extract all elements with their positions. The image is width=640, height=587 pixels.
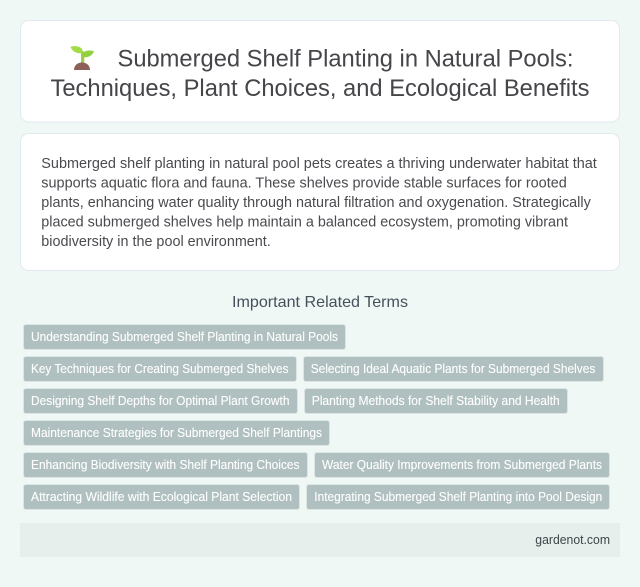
footer bbox=[20, 523, 620, 557]
tag 9: Attracting Wildlife with Ecological Plant Selection bbox=[31, 490, 292, 504]
tag 3 bbox=[304, 356, 604, 382]
tag 8 bbox=[314, 452, 610, 478]
tag 5: Planting Methods for Shelf Stability and Health bbox=[312, 394, 560, 408]
tag 6 bbox=[24, 420, 330, 446]
paragraph line 3: plants, enhancing water quality through natural filtration and oxygenation. Strategically bbox=[41, 195, 591, 211]
tag 8: Water Quality Improvements from Submerged Plants bbox=[322, 458, 602, 472]
paragraph line 2: supports aquatic flora and fauna. These shelves provide stable surfaces for rooted bbox=[41, 176, 567, 192]
tag 2 bbox=[24, 356, 296, 382]
icon: seedling bbox=[70, 46, 94, 70]
tag 4 bbox=[24, 388, 298, 414]
panel: title card bbox=[20, 20, 620, 122]
panel: summary paragraph bbox=[20, 134, 620, 270]
tag 4: Designing Shelf Depths for Optimal Plant Growth bbox=[31, 394, 290, 408]
paragraph line 4: placed submerged shelves help maintain a balanced ecosystem, promoting vibrant bbox=[41, 215, 568, 231]
tag 10 bbox=[306, 484, 610, 510]
tag 9 bbox=[24, 484, 300, 510]
title line 1: Submerged Shelf Planting in Natural Pools: bbox=[118, 46, 574, 72]
tag 3: Selecting Ideal Aquatic Plants for Submerged Shelves bbox=[311, 362, 595, 376]
title line 2: Techniques, Plant Choices, and Ecological Benefits bbox=[50, 75, 590, 102]
tag list bbox=[24, 324, 610, 510]
paragraph line 1: Submerged shelf planting in natural pool pets creates a thriving underwater habitat that bbox=[41, 156, 597, 172]
heading: related terms: Important Related Terms bbox=[232, 294, 408, 311]
tag 1: Understanding Submerged Shelf Planting in Natural Pools bbox=[31, 330, 338, 344]
tag 5 bbox=[304, 388, 568, 414]
footer source text: gardenot.com bbox=[535, 533, 610, 547]
tag 2: Key Techniques for Creating Submerged Shelves bbox=[31, 362, 288, 376]
paragraph line 5: biodiversity in the pool environment. bbox=[41, 234, 271, 250]
tag 10: Integrating Submerged Shelf Planting into Pool Design bbox=[314, 490, 602, 504]
tag 7 bbox=[24, 452, 308, 478]
tag 7: Enhancing Biodiversity with Shelf Planting Choices bbox=[31, 458, 300, 472]
tag 1 bbox=[24, 324, 346, 350]
tag 6: Maintenance Strategies for Submerged Shelf Plantings bbox=[31, 426, 322, 440]
